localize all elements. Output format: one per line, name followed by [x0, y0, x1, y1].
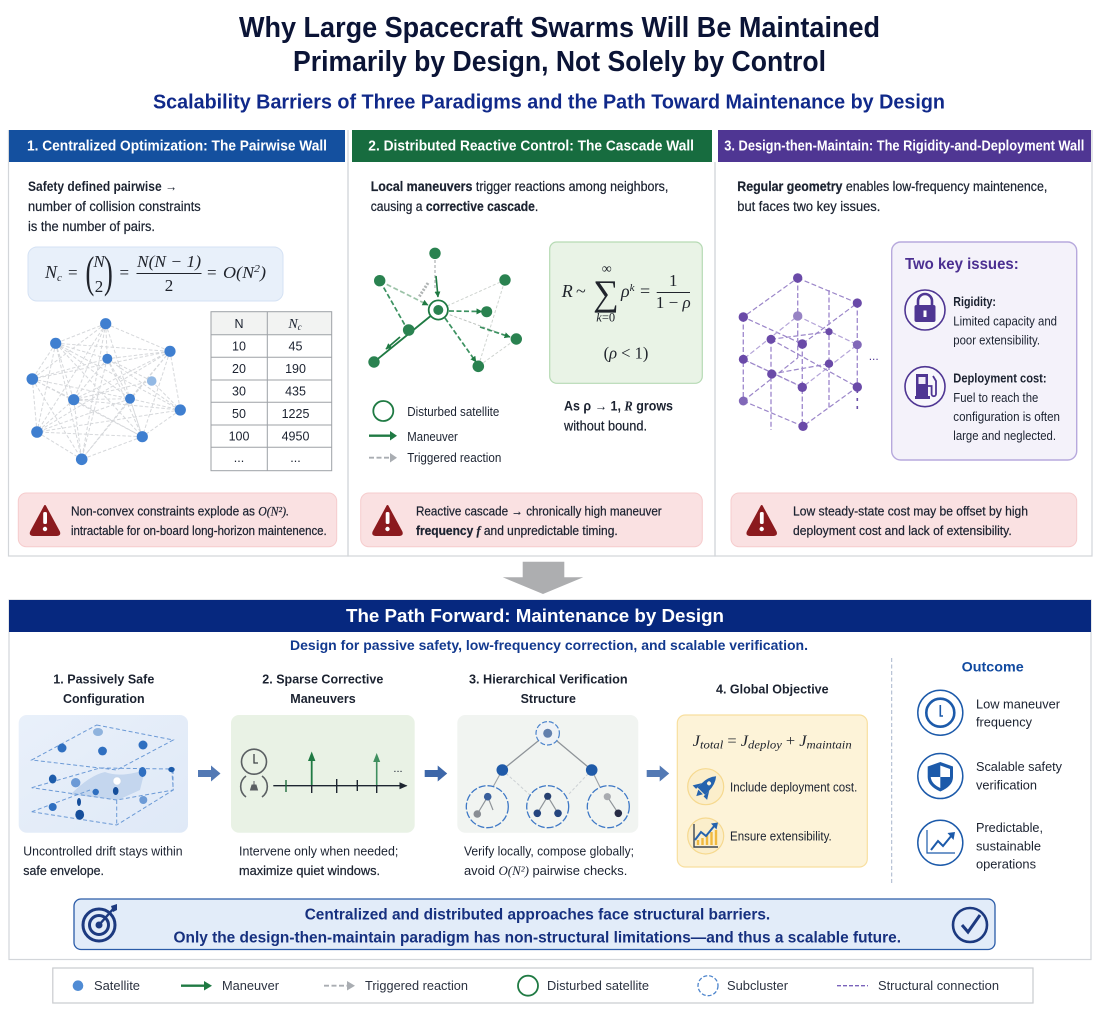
icon: check circle — [953, 908, 987, 942]
step 3: hierarchical verification structure: Verify locally, compose globally; — [464, 844, 634, 858]
table: N vs Nc: N — [288, 317, 298, 332]
text: rigidity: poor extensibility. — [953, 334, 1040, 348]
panel: outcome — [918, 658, 1063, 872]
formula: pairwise constraint count: N(N − 1) — [136, 252, 201, 271]
panel: design-then-maintain — [715, 130, 1092, 556]
legend: global: Subcluster — [727, 979, 788, 993]
panel 1 intro text: number of collision constraints — [28, 199, 201, 214]
step 1: passively safe configuration: safe envelope. — [23, 864, 104, 878]
callout: panel 3 warning: Low steady-state cost may be offset by high — [793, 504, 1028, 518]
text: deployment cost — [953, 372, 1060, 443]
step 1: passively safe configuration: 1. Passively Safe — [53, 672, 154, 686]
step 3: hierarchical verification structure — [457, 672, 638, 878]
panel: outcome: Scalable safety — [976, 760, 1063, 774]
table: N vs Nc: 10 — [232, 340, 246, 354]
panel 1 intro text — [28, 179, 201, 234]
formula: total objective: deploy — [748, 738, 783, 752]
step 2: sparse corrective maneuvers: Maneuvers — [290, 691, 356, 706]
formula: pairwise constraint count: O(N — [223, 263, 252, 282]
table: N vs Nc: 50 — [232, 407, 246, 421]
text: deployment cost: configuration is often — [953, 410, 1060, 424]
panel: two key issues — [892, 242, 1077, 460]
title: Primarily by Design, Not Solely by Control — [293, 46, 826, 78]
step 2: sparse corrective maneuvers: maximize quiet windows. — [239, 864, 380, 878]
panel: outcome: frequency — [976, 716, 1033, 730]
table: N vs Nc: ... — [290, 451, 301, 465]
table: N vs Nc: 100 — [229, 430, 249, 444]
table: N vs Nc: 190 — [285, 362, 306, 376]
legend: panel 2 — [369, 401, 501, 465]
illustration: safe envelope planes — [19, 715, 188, 833]
panel: centralized optimization — [8, 130, 348, 556]
step 3: hierarchical verification structure: 3. Hierarchical Verification — [469, 672, 628, 686]
callout: panel 1 warning: Non-convex constraints explode as O(N²). — [71, 504, 289, 518]
title — [239, 12, 880, 78]
formula: reaction series: ρ — [621, 281, 630, 301]
panel 3 intro text — [737, 179, 1047, 214]
panel: outcome: operations — [976, 858, 1036, 872]
table: N vs Nc: N — [234, 317, 244, 331]
step 4: global objective: Ensure extensibility. — [730, 830, 832, 844]
legend: global: Structural connection — [878, 979, 999, 993]
formula: total objective: J — [741, 733, 748, 750]
panel 1 intro text: Safety defined pairwise → — [28, 179, 177, 194]
formula: pairwise constraint count: N — [92, 252, 106, 271]
text: rho limit note — [563, 398, 673, 434]
formula: reaction series: R — [561, 281, 573, 301]
formula: reaction series: 1 — [669, 271, 678, 290]
text: rho limit note: without bound. — [563, 418, 647, 434]
formula: pairwise constraint count: 2 — [95, 277, 103, 296]
formula: total objective: = — [723, 733, 741, 750]
formula: reaction series: k — [630, 282, 636, 294]
formula: pairwise constraint count: ) — [104, 248, 113, 297]
panel: the path forward — [9, 600, 1091, 960]
arrow: step 2 to 3 — [425, 766, 447, 782]
legend: global: Satellite — [94, 979, 140, 993]
panel 1 header — [9, 130, 345, 162]
table: N vs Nc: 45 — [289, 340, 302, 354]
text: rigidity: Rigidity: — [953, 295, 996, 309]
formula: total objective: total — [700, 738, 724, 752]
step 3: hierarchical verification structure: avoid O(N²) pairwise checks. — [464, 864, 627, 878]
chart: lattice formation — [739, 273, 879, 431]
chart: lattice formation: ... — [869, 349, 879, 363]
formula: pairwise constraint count: N — [45, 262, 57, 282]
path forward header: The Path Forward: Maintenance by Design — [346, 605, 724, 626]
callout: conclusion: Only the design-then-maintain paradigm has non-structural limitations—and thus a scalable future. — [174, 930, 901, 946]
panel 1 intro text: is the number of pairs. — [28, 219, 155, 234]
legend: panel 2: Triggered reaction — [407, 451, 501, 465]
icon: fuel pump — [905, 367, 945, 407]
panel: outcome: Outcome — [962, 658, 1024, 674]
callout: conclusion: Centralized and distributed approaches face structural barriers. — [305, 906, 770, 924]
step 1: passively safe configuration: Configuration — [63, 691, 145, 706]
legend: global — [53, 968, 1033, 1003]
panel: outcome: sustainable — [976, 840, 1041, 854]
panel 2 header: 2. Distributed Reactive Control: The Cascade Wall — [368, 138, 694, 154]
table: N vs Nc — [211, 312, 332, 471]
step 2: sparse corrective maneuvers: 2. Sparse Corrective — [262, 672, 383, 686]
formula: reaction series: (ρ < 1) — [604, 344, 648, 362]
formula: pairwise constraint count: c — [57, 272, 62, 284]
table: N vs Nc: 20 — [232, 362, 246, 376]
path forward header — [9, 600, 1091, 632]
legend: global: Disturbed satellite — [547, 979, 649, 993]
formula: pairwise constraint count — [28, 247, 283, 301]
step 1: passively safe configuration: Uncontrolled drift stays within — [23, 844, 183, 858]
table: N vs Nc: c — [298, 322, 302, 332]
legend: global: Maneuver — [222, 979, 279, 993]
formula: pairwise constraint count: ) — [259, 263, 266, 282]
arrow: down to path forward — [503, 562, 583, 594]
panel 2 header — [352, 130, 712, 162]
panel 2 intro text: Local maneuvers trigger reactions among neighbors, — [371, 179, 668, 194]
text: rigidity — [953, 295, 1057, 348]
formula: pairwise constraint count: = — [120, 263, 129, 282]
icon: shield — [918, 754, 963, 798]
formula: reaction series: ∑ — [593, 273, 619, 313]
text: rho limit note: As ρ → 1, R grows — [564, 398, 673, 414]
formula: reaction series: = — [640, 281, 650, 301]
icon: target — [83, 904, 117, 941]
panel: outcome: verification — [976, 778, 1037, 792]
icon: lock — [905, 290, 945, 330]
formula: total objective: J — [799, 733, 806, 750]
formula: total objective: J — [693, 733, 700, 750]
text: rigidity: Limited capacity and — [953, 314, 1057, 328]
callout: panel 3 warning — [731, 493, 1077, 547]
step 3: hierarchical verification structure: Structure — [521, 691, 576, 706]
panel 2 intro text — [371, 179, 668, 214]
formula: pairwise constraint count: = — [207, 263, 217, 282]
illustration: timeline: ... — [393, 763, 403, 775]
formula: total objective: + — [782, 733, 799, 750]
path forward subtitle: Design for passive safety, low-frequency correction, and scalable verification. — [290, 638, 808, 653]
callout: panel 2 warning: Reactive cascade → chronically high maneuver — [416, 504, 662, 518]
formula: reaction series: 1 − ρ — [656, 293, 691, 312]
illustration: verification tree — [457, 715, 638, 833]
arrow: step 1 to 2 — [198, 766, 220, 782]
formula: reaction series: ~ — [576, 281, 586, 301]
text: deployment cost: Deployment cost: — [953, 372, 1047, 386]
legend: panel 2: Maneuver — [407, 430, 458, 444]
formula: pairwise constraint count: = — [68, 263, 78, 282]
table: N vs Nc: 1225 — [282, 407, 309, 421]
panel 3 header — [718, 130, 1091, 162]
step 2: sparse corrective maneuvers — [231, 672, 415, 878]
callout: conclusion — [74, 899, 995, 950]
table: N vs Nc: 30 — [232, 384, 246, 398]
icon: trend chart — [918, 820, 963, 865]
formula: pairwise constraint count: 2 — [254, 263, 261, 275]
callout: panel 2 warning: frequency f and unpredictable timing. — [416, 524, 618, 538]
callout: panel 1 warning — [18, 493, 337, 547]
step 2: sparse corrective maneuvers: Intervene only when needed; — [239, 844, 398, 858]
step 1: passively safe configuration — [19, 672, 188, 878]
panel 1 header: 1. Centralized Optimization: The Pairwise Wall — [27, 138, 327, 154]
callout: panel 2 warning — [361, 493, 702, 547]
step 4: global objective: 4. Global Objective — [716, 682, 829, 696]
step 4: global objective: Include deployment cost. — [730, 780, 857, 794]
illustration: timeline — [231, 715, 415, 833]
formula: pairwise constraint count: 2 — [165, 276, 173, 295]
panel 3 intro text: but faces two key issues. — [737, 199, 880, 214]
icon: rocket — [688, 769, 724, 805]
panel: two key issues: Two key issues: — [905, 256, 1019, 273]
panel: outcome: Low maneuver — [976, 698, 1060, 712]
text: deployment cost: Fuel to reach the — [953, 391, 1038, 405]
formula: reaction series: ∞ — [602, 262, 612, 277]
formula: reaction series: k=0 — [596, 310, 615, 324]
table: N vs Nc: ... — [234, 451, 244, 465]
formula: pairwise constraint count: ( — [86, 248, 94, 297]
step 4: global objective — [677, 682, 867, 867]
chart: all-pairs network — [26, 318, 186, 465]
arrow: step 3 to 4 — [647, 766, 669, 782]
table: N vs Nc: 435 — [285, 384, 306, 398]
icon: clock — [918, 690, 963, 735]
callout: panel 3 warning: deployment cost and lack of extensibility. — [793, 524, 1012, 538]
table: N vs Nc: 4950 — [282, 430, 309, 444]
subtitle: Scalability Barriers of Three Paradigms and the Path Toward Maintenance by Design — [153, 92, 945, 114]
legend: global: Triggered reaction — [365, 979, 468, 993]
formula: reaction series — [550, 242, 702, 383]
chart: reactive cascade network — [368, 248, 522, 372]
panel 3 intro text: Regular geometry enables low-frequency maintenence, — [737, 179, 1047, 194]
text: deployment cost: large and neglected. — [953, 429, 1056, 443]
panel 2 intro text: causing a corrective cascade. — [371, 199, 538, 214]
panel: outcome: Predictable, — [976, 821, 1043, 835]
formula: total objective: maintain — [807, 738, 852, 752]
title: Why Large Spacecraft Swarms Will Be Maintained — [239, 12, 880, 44]
icon: growth chart — [688, 818, 724, 854]
panel: distributed reactive control — [348, 130, 715, 556]
callout: panel 1 warning: intractable for on-board long-horizon maintenence. — [71, 524, 327, 538]
legend: panel 2: Disturbed satellite — [407, 405, 499, 419]
